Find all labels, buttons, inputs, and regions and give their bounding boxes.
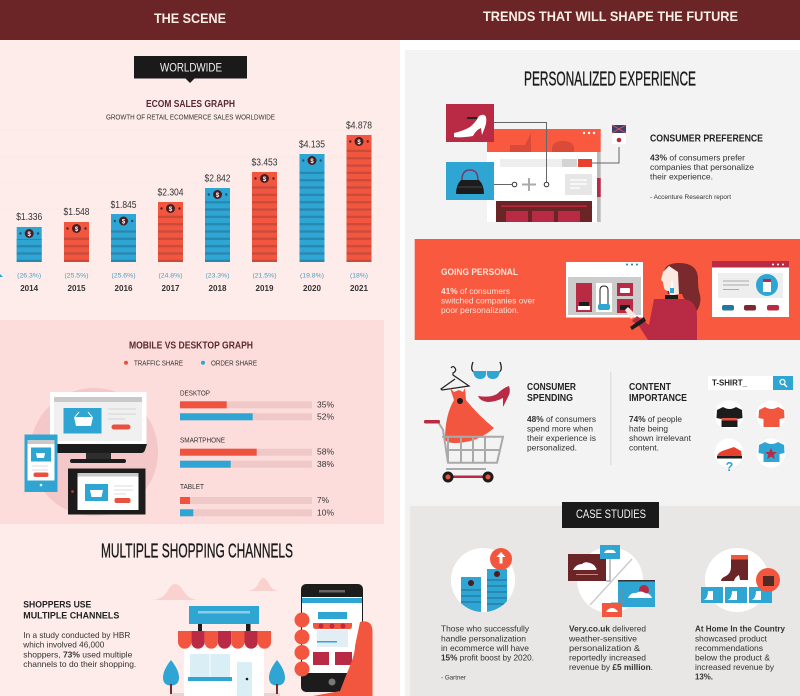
icon: weather personalization bbox=[568, 545, 655, 617]
legend: TRAFFIC SHARE bbox=[134, 360, 183, 367]
text: content importance: 74% of people bbox=[629, 414, 682, 424]
bar 2021: (18%) bbox=[350, 272, 368, 279]
bar 2016: $1.845 bbox=[110, 200, 137, 211]
text: content importance: content. bbox=[629, 443, 659, 453]
panel: case studies bbox=[405, 502, 800, 696]
bar 2020 bbox=[299, 140, 325, 293]
subheading: growth of retail ecommerce: GROWTH OF RETAIL ECOMMERCE SALES WORLDWIDE bbox=[106, 115, 275, 122]
text: shoppers use multiple channels bbox=[22, 600, 136, 669]
panel: going personal bbox=[415, 239, 800, 340]
text: shoppers use multiple channels: In a study conducted by HBR bbox=[23, 630, 130, 640]
bar 2018 bbox=[204, 174, 231, 293]
legend: ORDER SHARE bbox=[211, 360, 257, 367]
text: profit boost: 15% profit boost by 2020. bbox=[441, 653, 534, 663]
icon: handbag tile bbox=[446, 162, 494, 200]
bar 2014: $1.336 bbox=[16, 212, 43, 223]
text: going personal bbox=[441, 267, 535, 315]
bar 2021: $ bbox=[357, 140, 361, 146]
bar 2016 bbox=[110, 200, 137, 293]
text: very.co.uk: personalization & bbox=[569, 643, 640, 653]
chart: desktop bars: 35% bbox=[317, 399, 334, 409]
bar 2019: $ bbox=[263, 177, 267, 183]
badge: case studies bbox=[562, 502, 659, 528]
bar 2015: 2015 bbox=[68, 283, 86, 293]
bar 2016: 2016 bbox=[114, 283, 133, 293]
text: going personal: switched companies over bbox=[441, 296, 535, 306]
badge: worldwide bbox=[134, 56, 247, 83]
icon: devices illustration bbox=[24, 388, 158, 516]
text: at home in the country: recommendations bbox=[695, 643, 763, 653]
bar 2017 bbox=[158, 188, 184, 293]
text: profit boost: - Gartner bbox=[441, 676, 466, 682]
badge: case studies: CASE STUDIES bbox=[576, 509, 646, 521]
bar 2021: $4.878 bbox=[346, 120, 372, 131]
bar 2015 bbox=[64, 207, 90, 293]
chart: desktop bars bbox=[180, 389, 334, 422]
text: at home in the country: increased revenue by bbox=[695, 662, 775, 672]
text: content importance: CONTENT bbox=[629, 382, 671, 393]
text: consumer preference bbox=[650, 133, 763, 201]
bar 2018: $2.842 bbox=[204, 174, 231, 185]
icon: store illustration bbox=[153, 578, 285, 696]
chart: desktop bars: DESKTOP bbox=[180, 389, 210, 398]
legend bbox=[124, 360, 257, 367]
chart: desktop bars: 52% bbox=[317, 412, 334, 422]
text: consumer spending: SPENDING bbox=[527, 393, 573, 404]
bar 2014: 2014 bbox=[20, 283, 38, 293]
panel: trends background bbox=[405, 50, 800, 696]
text: shoppers use multiple channels: channels to do their shopping. bbox=[23, 659, 136, 669]
text: shoppers use multiple channels: MULTIPLE CHANNELS bbox=[23, 611, 119, 622]
bar 2017: $2.304 bbox=[158, 188, 184, 199]
text: content importance bbox=[629, 382, 692, 453]
chart: smartphone bars: 38% bbox=[317, 459, 334, 469]
badge: worldwide: WORLDWIDE bbox=[160, 62, 222, 74]
heading: ecom sales graph: ECOM SALES GRAPH bbox=[146, 99, 235, 110]
bar 2017: $ bbox=[169, 207, 173, 213]
panel: header the scene: THE SCENE bbox=[154, 10, 226, 26]
text: very.co.uk: revenue by £5 million. bbox=[569, 662, 653, 672]
icon: product browser right bbox=[712, 261, 789, 317]
text: at home in the country: showcased product bbox=[695, 633, 768, 643]
bar 2016: (25.6%) bbox=[112, 272, 136, 279]
chart: tablet bars: 10% bbox=[317, 508, 334, 518]
text: consumer preference: CONSUMER PREFERENCE bbox=[650, 133, 763, 144]
bar 2021 bbox=[346, 120, 372, 293]
icon: shoe tile bbox=[446, 104, 494, 142]
text: shoppers use multiple channels: SHOPPERS USE bbox=[23, 600, 91, 611]
text: content importance: IMPORTANCE bbox=[629, 393, 687, 404]
bar 2018: 2018 bbox=[208, 283, 227, 293]
icon: search box: T-SHIRT_ bbox=[712, 379, 748, 388]
text: going personal: GOING PERSONAL bbox=[441, 267, 518, 278]
icon: product recommendations bbox=[701, 548, 780, 612]
text: consumer spending: personalized. bbox=[527, 443, 577, 453]
icon: personalized browser illustration bbox=[446, 104, 626, 222]
icon: shopping cart with items bbox=[424, 362, 510, 482]
bar chart: ecommerce sales bbox=[0, 120, 385, 293]
text: going personal: 41% of consumers bbox=[441, 286, 510, 296]
text: at home in the country: At Home In the Country bbox=[695, 624, 785, 634]
chart: smartphone bars bbox=[180, 435, 334, 469]
text: profit boost bbox=[441, 624, 534, 682]
bar 2014: $ bbox=[28, 232, 32, 238]
icon: woman shopper bbox=[625, 263, 700, 340]
bar 2019: (21.5%) bbox=[252, 272, 276, 279]
text: shoppers use multiple channels: which involved 46,000 bbox=[22, 640, 105, 650]
text: consumer preference: 43% of consumers prefer bbox=[650, 153, 745, 163]
text: consumer spending: 48% of consumers bbox=[527, 414, 596, 424]
chart: tablet bars: 7% bbox=[317, 495, 329, 505]
bar 2018: (23.3%) bbox=[206, 272, 230, 279]
heading: mobile vs desktop graph: MOBILE VS DESKTOP GRAPH bbox=[129, 341, 253, 352]
text: at home in the country bbox=[695, 624, 785, 682]
text: profit boost: in ecommerce will have bbox=[441, 643, 529, 653]
panel: mobile vs desktop bbox=[0, 320, 384, 524]
icon: profit boost bbox=[451, 548, 515, 617]
text: content importance: shown irrelevant bbox=[629, 433, 692, 443]
bar 2015: $ bbox=[75, 227, 79, 233]
text: very.co.uk: weather-sensitive bbox=[568, 633, 637, 643]
text: content importance: hate being bbox=[629, 424, 668, 434]
bar 2019: $3.453 bbox=[252, 158, 278, 169]
text: consumer spending: their experience is bbox=[527, 433, 596, 443]
text: profit boost: Those who successfully bbox=[441, 624, 530, 634]
icon: product results bbox=[714, 400, 786, 474]
text: at home in the country: 13%. bbox=[695, 672, 713, 682]
text: consumer preference: their experience. bbox=[650, 171, 713, 181]
text: shoppers use multiple channels: shoppers, 73% used multiple bbox=[23, 650, 133, 660]
icon: product browser left bbox=[566, 262, 643, 318]
bar 2015: (25.5%) bbox=[64, 272, 88, 279]
text: going personal: poor personalization. bbox=[441, 305, 519, 315]
bar 2014: (26.3%) bbox=[17, 272, 41, 279]
text: very.co.uk: reportedly increased bbox=[569, 653, 646, 663]
text: consumer preference: companies that personalize bbox=[650, 162, 754, 172]
bar 2014 bbox=[16, 212, 43, 293]
bar 2020: 2020 bbox=[303, 283, 321, 293]
icon: product results: ? bbox=[726, 460, 733, 474]
bar 2020: $ bbox=[310, 159, 314, 165]
text: consumer spending: spend more when bbox=[527, 424, 593, 434]
panel: header the scene bbox=[0, 0, 400, 40]
bar 2020: $4.135 bbox=[299, 140, 325, 151]
text: consumer spending: CONSUMER bbox=[527, 382, 577, 393]
text: very.co.uk: Very.co.uk delivered bbox=[569, 624, 646, 634]
chart: smartphone bars: SMARTPHONE bbox=[180, 435, 225, 444]
bar 2017: 2017 bbox=[162, 283, 180, 293]
panel: header trends bbox=[400, 0, 800, 40]
icon: search box bbox=[708, 376, 793, 390]
bar 2019: 2019 bbox=[256, 283, 274, 293]
chart: tablet bars: TABLET bbox=[180, 482, 204, 491]
bar 2018: $ bbox=[216, 193, 220, 199]
bar 2016: $ bbox=[122, 220, 126, 226]
chart: tablet bars bbox=[180, 482, 334, 518]
icon: phone in hand bbox=[294, 584, 372, 696]
text: profit boost: handle personalization bbox=[441, 633, 526, 643]
bar 2017: (24.8%) bbox=[158, 272, 182, 279]
bar 2021: 2021 bbox=[350, 283, 368, 293]
bar 2020: (19.8%) bbox=[300, 272, 324, 279]
text: very.co.uk bbox=[568, 624, 653, 672]
text: consumer spending bbox=[527, 382, 596, 453]
heading: multiple shopping channels: MULTIPLE SHOPPING CHANNELS bbox=[101, 540, 293, 562]
text: at home in the country: below the product & bbox=[695, 653, 770, 663]
panel: header trends: TRENDS THAT WILL SHAPE THE FUTURE bbox=[483, 8, 738, 24]
panel: the scene background bbox=[0, 40, 400, 696]
text: consumer preference: - Accenture Research report bbox=[650, 194, 731, 201]
bar 2019 bbox=[252, 158, 278, 293]
chart: smartphone bars: 58% bbox=[317, 447, 334, 457]
bar 2015: $1.548 bbox=[64, 207, 90, 218]
